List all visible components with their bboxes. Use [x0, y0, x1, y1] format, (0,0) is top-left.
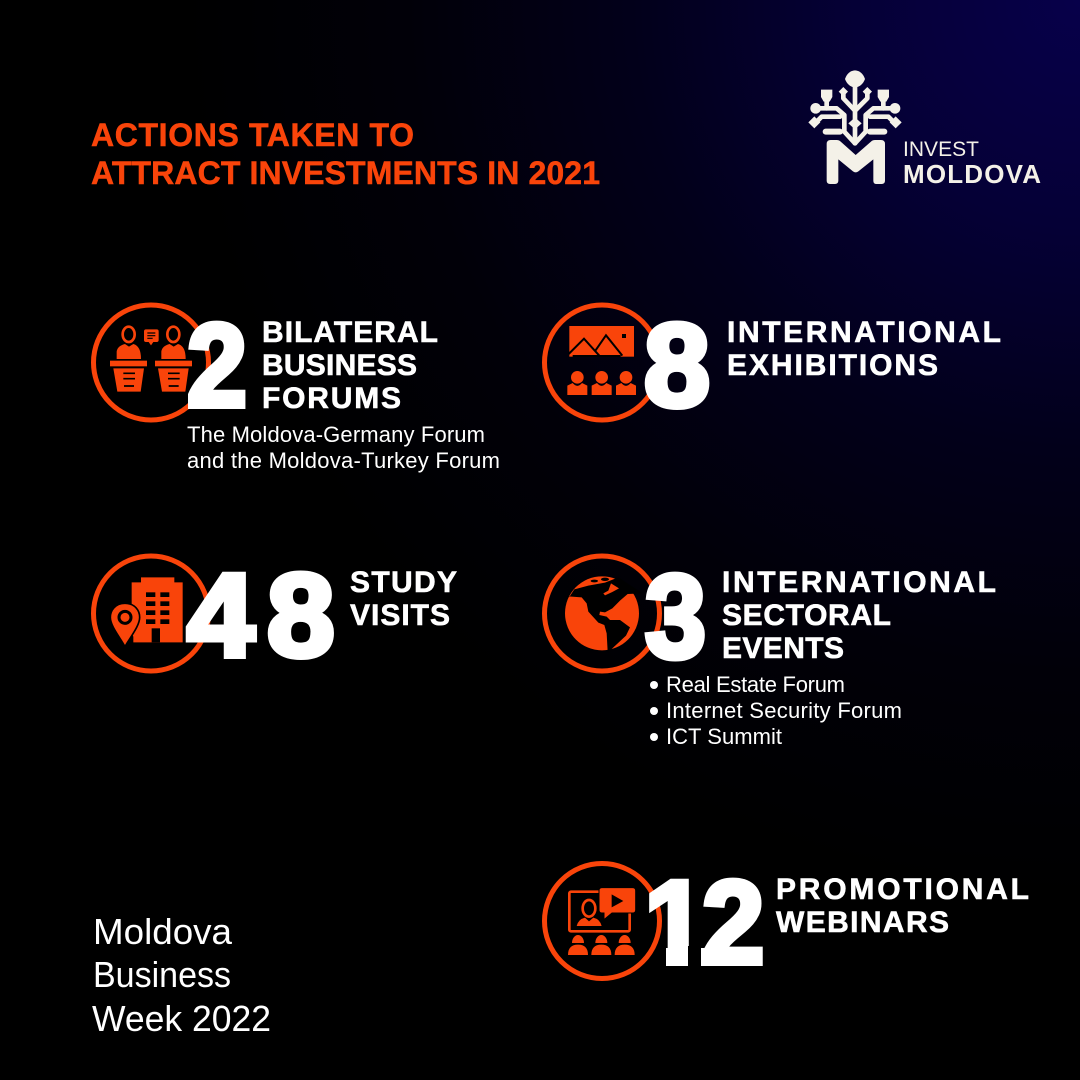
- label: study visits: [350, 566, 457, 632]
- logo: Invest Moldova: [808, 70, 1041, 189]
- panel: study visits: [94, 551, 457, 682]
- label: international sectoral events: EVENTS: [722, 632, 844, 665]
- description: forums: [187, 422, 500, 473]
- icon: webinar: [544, 864, 660, 978]
- label: international sectoral events: INTERNATIONAL: [722, 566, 996, 599]
- label: international exhibitions: INTERNATIONAL: [727, 316, 1001, 349]
- number: 8: 8: [644, 300, 710, 432]
- label: bilateral business forums: [262, 316, 438, 415]
- label: study visits: VISITS: [350, 599, 450, 632]
- description: forums: and the Moldova-Turkey Forum: [187, 448, 500, 473]
- list: events: [650, 672, 902, 749]
- label: bilateral business forums: BUSINESS: [262, 349, 417, 382]
- footer text: Moldova Business Week 2022: Business: [93, 954, 231, 995]
- label: promotional webinars: WEBINARS: [776, 906, 949, 939]
- icon: globe: [544, 556, 660, 671]
- icon: exhibition: [544, 305, 660, 420]
- panel: promotional webinars: [544, 857, 1029, 989]
- list: events: Real Estate Forum: [666, 672, 845, 697]
- list: events: ICT Summit: [666, 724, 782, 749]
- title: ACTIONS TAKEN TO: [91, 117, 414, 153]
- icon: logo M: [827, 140, 885, 184]
- footer text: Moldova Business Week 2022: Week 2022: [92, 998, 271, 1039]
- list: events: Internet Security Forum: [666, 698, 902, 723]
- label: international exhibitions: [727, 316, 1001, 382]
- label: international sectoral events: SECTORAL: [722, 599, 891, 632]
- footer text: Moldova Business Week 2022: [92, 911, 271, 1039]
- title: [91, 117, 600, 191]
- icon: logo tree: [808, 70, 902, 143]
- logo: Invest Moldova: MOLDOVA: [903, 159, 1041, 189]
- panel: international sectoral events: [544, 551, 996, 749]
- description: forums: The Moldova-Germany Forum: [187, 422, 485, 447]
- label: bilateral business forums: FORUMS: [262, 382, 401, 415]
- number: 3: 3: [645, 551, 706, 683]
- panel: bilateral business forums: [94, 300, 500, 473]
- number: 12: 12: [644, 857, 764, 989]
- icon: forum speakers: [94, 305, 208, 420]
- number: 48: 48: [187, 551, 335, 682]
- label: international sectoral events: [722, 566, 996, 665]
- number: 2: 2: [187, 300, 247, 432]
- footer text: Moldova Business Week 2022: Moldova: [93, 911, 233, 952]
- icon: building with location pin: [94, 556, 208, 671]
- label: promotional webinars: PROMOTIONAL: [776, 873, 1029, 906]
- label: bilateral business forums: BILATERAL: [262, 316, 438, 349]
- panel: international exhibitions: [544, 300, 1001, 432]
- title: ATTRACT INVESTMENTS IN 2021: [91, 155, 600, 191]
- label: study visits: STUDY: [350, 566, 457, 599]
- label: promotional webinars: [776, 873, 1029, 939]
- label: international exhibitions: EXHIBITIONS: [727, 349, 938, 382]
- logo: Invest Moldova: INVEST: [903, 138, 979, 161]
